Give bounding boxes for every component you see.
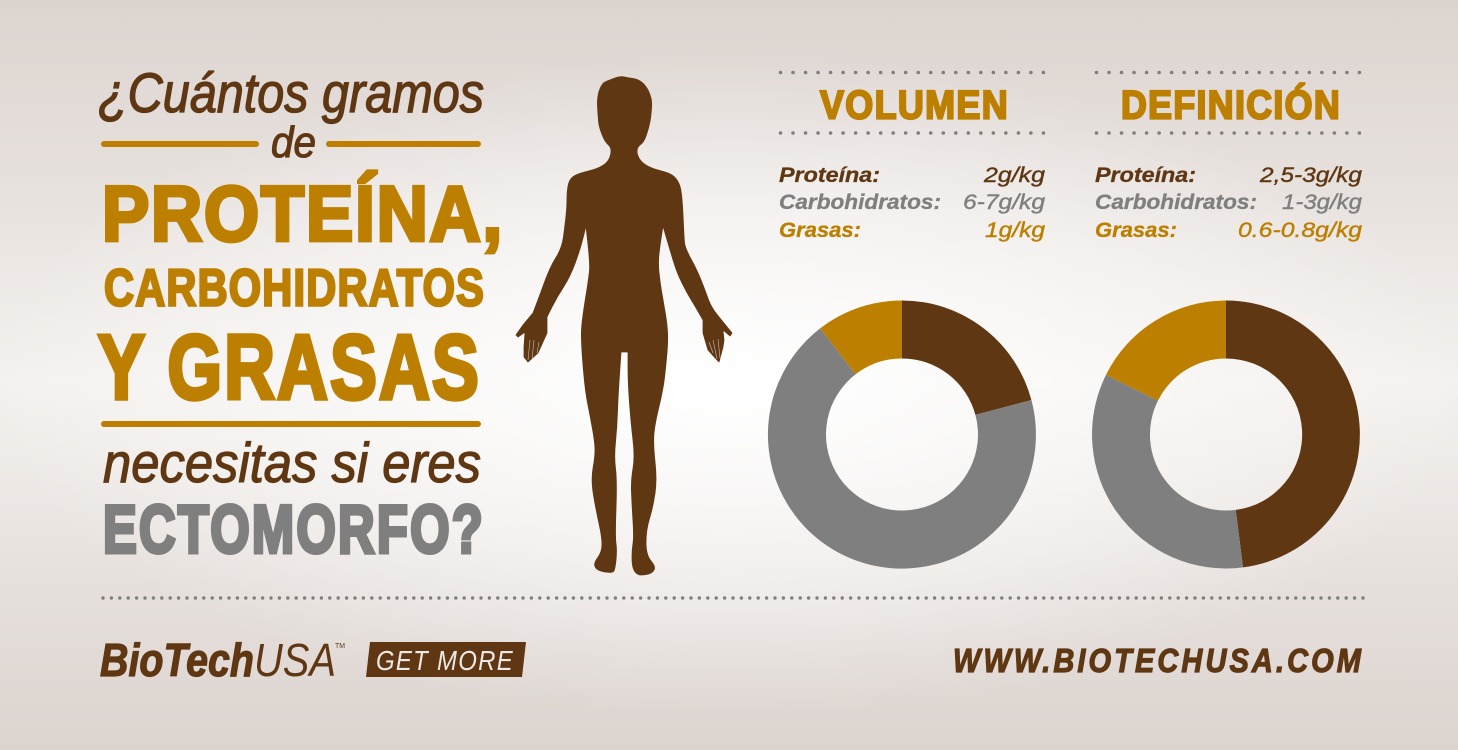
badge: get more: GET MORE: [376, 645, 514, 676]
title word: proteína: PROTEÍNA,: [102, 170, 504, 258]
heading: volumen: VOLUMEN: [820, 84, 1009, 128]
icon: human body silhouette: [516, 77, 732, 575]
table: definición values: Proteína:: [1095, 164, 1196, 187]
donut chart: definición: [1092, 300, 1360, 568]
title block: [98, 61, 504, 568]
panel: volumen: [768, 72, 1046, 569]
table: definición values: [1095, 164, 1362, 242]
table: volumen values: Grasas:: [779, 219, 861, 242]
panel: definición: [1092, 72, 1363, 568]
table: definición values: Carbohidratos:: [1095, 191, 1257, 214]
title word: de, with rules: de: [271, 118, 316, 167]
table: volumen values: Proteína:: [779, 164, 880, 187]
dotted rule: [780, 131, 1046, 135]
table: definición values: 1-3g/kg: [1282, 191, 1362, 214]
heading: definición: DEFINICIÓN: [1121, 82, 1341, 128]
table: definición values: Grasas:: [1095, 219, 1177, 242]
logo: BioTechUSA: USA: [254, 634, 336, 686]
title word: de, with rules: [101, 118, 481, 167]
title word: ectomorfo: ECTOMORFO?: [103, 492, 485, 568]
title word: carbohidratos: CARBOHIDRATOS: [104, 260, 485, 318]
table: definición values: 2,5-3g/kg: [1259, 164, 1362, 187]
title rule: [101, 421, 481, 427]
website url: WWW.BIOTECHUSA.COM: [953, 642, 1364, 679]
dotted rule: [780, 71, 1046, 74]
table: volumen values: 2g/kg: [983, 164, 1045, 187]
donut chart: volumen: [768, 300, 1036, 569]
logo: BioTechUSA: BioTech: [100, 634, 254, 686]
title line: Cuántos gramos: ¿Cuántos gramos: [98, 61, 484, 124]
dotted rule: [1096, 71, 1363, 74]
table: volumen values: 1g/kg: [985, 219, 1045, 242]
dotted rule: [1096, 131, 1363, 135]
table: volumen values: Carbohidratos:: [779, 191, 941, 214]
table: volumen values: [779, 164, 1045, 242]
logo: BioTechUSA: TM: [335, 643, 345, 650]
title word: y grasas: Y GRASAS: [98, 318, 481, 418]
table: volumen values: 6-7g/kg: [963, 191, 1045, 214]
title line: necesitas si eres: necesitas si eres: [103, 431, 481, 494]
table: definición values: 0.6-0.8g/kg: [1238, 219, 1362, 242]
